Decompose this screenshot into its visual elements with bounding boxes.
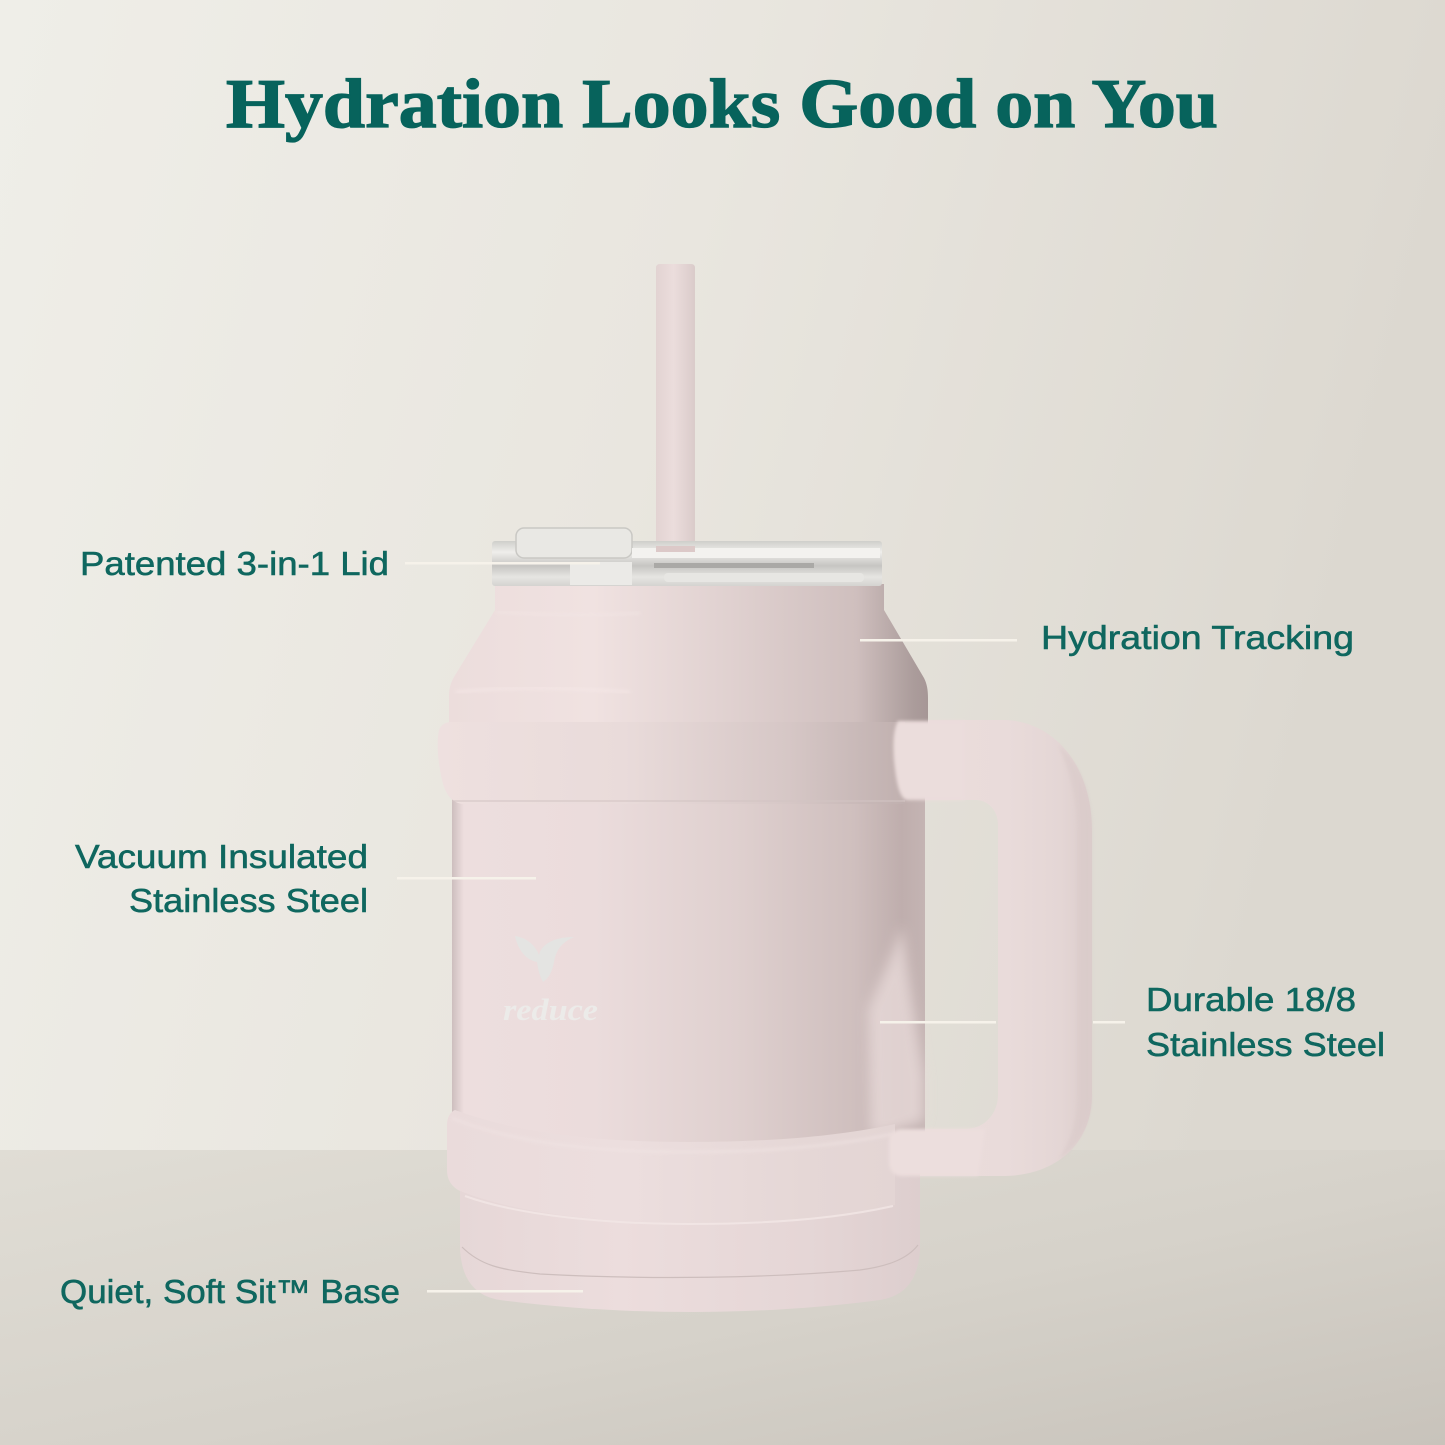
lid dark reflection <box>654 563 814 568</box>
label line two: Stainless Steel <box>1146 1026 1385 1063</box>
label text: Hydration Tracking <box>1041 619 1354 656</box>
lid <box>492 528 882 586</box>
leader line <box>427 1290 583 1292</box>
leader line <box>860 639 1017 642</box>
label line one: Vacuum Insulated <box>75 838 368 875</box>
handle <box>880 720 1092 1176</box>
label text: Quiet, Soft Sit™ Base <box>60 1273 400 1310</box>
straw <box>656 264 695 550</box>
lower body section <box>460 1170 920 1312</box>
label text: Patented 3-in-1 Lid <box>80 545 389 582</box>
floor <box>0 1150 1445 1445</box>
lid flap <box>516 528 632 558</box>
lid straw tint <box>656 546 695 552</box>
leader line <box>397 877 536 880</box>
lid clear section <box>632 548 880 558</box>
body reflection <box>868 925 924 1135</box>
lower band ridge <box>452 1118 893 1152</box>
label line two: Stainless Steel <box>129 882 368 919</box>
upper collar band <box>438 722 905 804</box>
lid front block <box>570 562 632 585</box>
leader line <box>405 562 600 564</box>
base soft sit line <box>462 1245 918 1277</box>
label: vacuum insulated <box>75 838 536 919</box>
background wall <box>0 0 1445 1150</box>
lower band <box>447 1110 895 1223</box>
handle joint upper <box>893 721 965 800</box>
lower band bottom edge <box>465 1196 893 1224</box>
logo on mug <box>503 936 598 1027</box>
lid lower highlight <box>664 573 864 582</box>
logo wordmark: reduce <box>503 992 598 1027</box>
mug body <box>452 790 925 1150</box>
product: pink insulated mug <box>438 264 1092 1312</box>
label: durable steel <box>880 981 1385 1063</box>
title: Hydration Looks Good on You <box>226 66 1218 143</box>
logo leaf mark <box>515 936 574 982</box>
collar bottom edge <box>452 800 905 802</box>
lid rim <box>492 541 882 586</box>
handle side shading <box>1058 745 1092 1160</box>
shoulder <box>449 584 928 726</box>
handle joint lower <box>889 1129 985 1176</box>
shoulder upper crease <box>497 612 640 615</box>
shoulder lower crease <box>456 688 630 692</box>
leader line right <box>1093 1021 1125 1024</box>
label line one: Durable 18/8 <box>1146 981 1356 1018</box>
leader line left <box>880 1021 996 1024</box>
